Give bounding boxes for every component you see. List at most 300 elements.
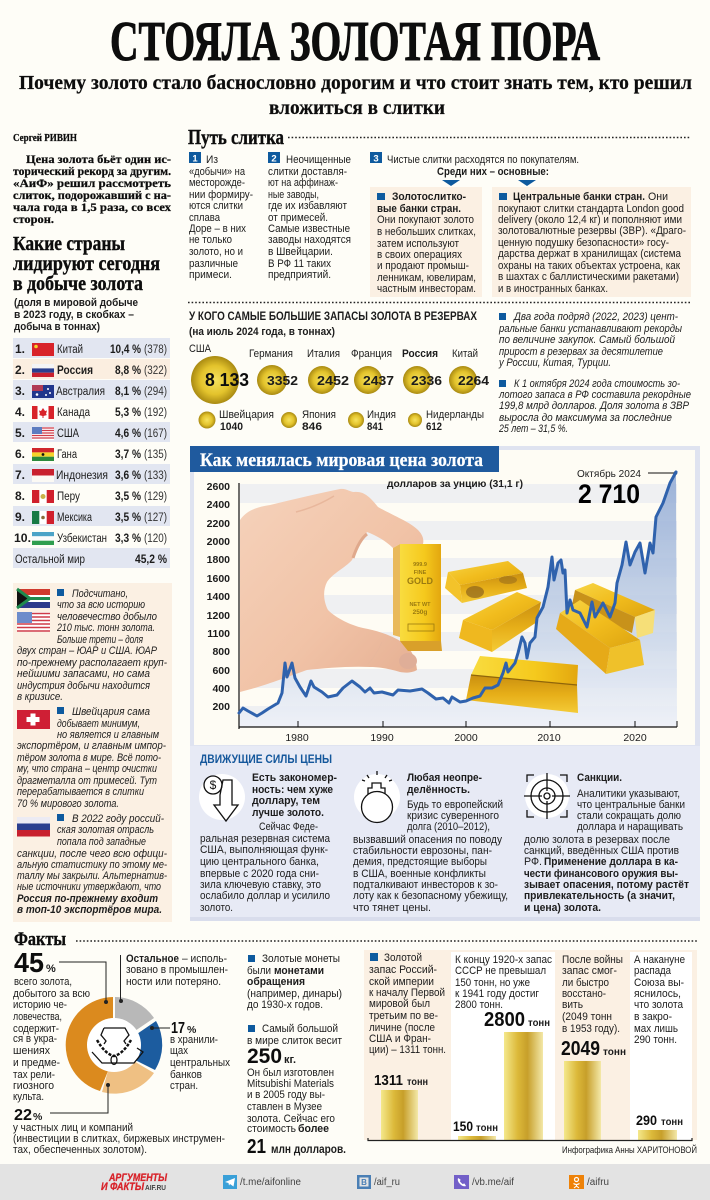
text: Switzerland: Швейцария сама xyxy=(72,706,150,718)
bubble: Russia xyxy=(402,348,442,394)
column: collapse of USSR: что золота xyxy=(634,999,684,1011)
step 2: от примесей. xyxy=(268,212,328,224)
text: Russia sanctions: Россия по-прежнему входит xyxy=(17,893,158,905)
callout: 45%: гиозного xyxy=(13,1080,54,1092)
subheading: (доля в мировой добыче xyxy=(14,297,138,309)
bubble: Germany xyxy=(249,348,298,395)
heading: driving forces: ДВИЖУЩИЕ СИЛЫ ЦЕНЫ xyxy=(200,752,332,766)
panel: bullion banks: частным инвесторам. xyxy=(377,283,476,295)
text: Russian reserve value xyxy=(498,378,691,435)
row: Canada: (192) xyxy=(144,407,167,419)
link: vk: /aif_ru xyxy=(374,1177,400,1188)
row: Uzbekistan: (120) xyxy=(144,533,167,545)
step 1: «добычи» на xyxy=(189,166,246,178)
text: sanctions: долю золота в резервах после xyxy=(524,834,670,846)
callout: 45%: ловечества, xyxy=(13,1011,62,1023)
callout: October 2024: Октябрь 2024 xyxy=(577,468,641,480)
row: Uzbekistan: 3,3 % xyxy=(115,531,141,545)
column: Russian Empire: личине (после xyxy=(369,1022,435,1034)
column: collapse of USSR: мах лишь xyxy=(634,1023,678,1035)
callout: 45%: культа. xyxy=(13,1091,44,1103)
panel: central banks: золотовалютные резервы (ЗВР). «Драго- xyxy=(498,225,686,237)
heading: gold mining leaders: лидируют сегодня xyxy=(13,253,160,275)
column: postwar: тонн xyxy=(603,1046,626,1058)
callout: 17%: щах xyxy=(170,1045,188,1057)
text: Switzerland xyxy=(17,706,166,810)
heading: gold mining leaders: Какие страны xyxy=(13,233,125,255)
y axis: 800 xyxy=(212,646,230,658)
panel: central banks: Центральные банки стран. xyxy=(513,191,645,203)
column: Russian Empire: ской империи xyxy=(369,976,434,988)
callout: rest: зовано в промышлен- xyxy=(126,964,228,976)
step 1: примеси. xyxy=(189,269,232,281)
y axis: 2600 xyxy=(207,481,230,493)
text: uncertainty: в США, военные конфликты xyxy=(353,868,486,880)
column: USSR 1920s: К концу 1920-х запас xyxy=(455,954,552,966)
text: largest ingot: в мире слиток весит xyxy=(247,1035,342,1047)
column: USSR 1920s: к 1941 году достиг xyxy=(455,988,539,1000)
row: Australia: 3. xyxy=(15,384,25,398)
row: Canada: 4. xyxy=(15,405,25,419)
column: USSR 1920s: 2800 xyxy=(484,1009,525,1031)
text: uncertainty: лоту как к безопасному убежищу, xyxy=(353,890,508,902)
text: largest ingot: Самый большой xyxy=(262,1023,338,1035)
column: collapse of USSR: яснилось, xyxy=(634,988,681,1000)
bubble: France: Франция xyxy=(351,348,392,360)
column: USSR 1920s: СССР не превышал xyxy=(455,965,546,977)
row: China: Китай xyxy=(57,344,83,356)
text: central bank purchases: по величине закупок. Самый большой xyxy=(499,334,675,346)
row: Peru: 8. xyxy=(15,489,25,503)
panel: bullion banks: ленникам, ювелирам, xyxy=(377,272,476,284)
bubble: India: 841 xyxy=(367,421,383,433)
text: uncertainty: кризис суверенного xyxy=(407,810,499,822)
text: sanctions: стали сокращать долю xyxy=(577,810,681,822)
step 1 xyxy=(189,152,253,281)
panel: central banks: дарства держат в хранилищах (система xyxy=(498,248,682,260)
row: Australia xyxy=(15,384,167,398)
step 2: 2 xyxy=(271,154,277,164)
row: Australia: Австралия xyxy=(56,386,105,398)
panel: bullion banks: и продают промыш- xyxy=(377,260,469,272)
segment: jewellery 45% xyxy=(66,997,113,1091)
bubble: Netherlands xyxy=(408,409,484,433)
row: Mexico: 9. xyxy=(15,510,25,524)
bubble: USA xyxy=(189,343,249,404)
row: Indonesia: (133) xyxy=(144,470,167,482)
panel: central banks: ценную подушку безопасности» госу- xyxy=(498,237,669,249)
text: largest ingot: золота. Сейчас его xyxy=(247,1113,335,1125)
column: postwar: ли быстро xyxy=(562,977,609,989)
step 2: где их избавляют xyxy=(268,200,347,212)
row: Uzbekistan: Узбекистан xyxy=(57,533,107,545)
gold ingot bottom xyxy=(466,656,578,713)
text: world gold: Больше трети – доля xyxy=(57,634,143,646)
step 3: 3 xyxy=(373,154,379,164)
y axis: 600 xyxy=(212,665,230,677)
panel: bullion banks: Они покупают золото xyxy=(377,214,474,226)
callout: rest xyxy=(119,953,228,1003)
text: dollar law: доллару, тем xyxy=(252,795,320,807)
callout: 22%: % xyxy=(33,1111,43,1123)
gold ingot upright xyxy=(393,544,442,651)
row: USA xyxy=(15,426,167,440)
callout: 17%: банков xyxy=(170,1069,202,1081)
link: odnoklassniki: /aifru xyxy=(587,1177,609,1188)
chart title banner: Как менялась мировая цена золота xyxy=(200,450,483,471)
step 2: в Швейцарии. xyxy=(268,246,333,258)
step 1: нии формиру- xyxy=(189,189,253,201)
row: China: 10,4 % xyxy=(110,342,141,356)
text: uncertainty: вызвавший опасения по поводу xyxy=(353,834,502,846)
column: USSR 1920s: тонн xyxy=(476,1122,498,1134)
text: dollar law: США, выполняющая функ- xyxy=(200,844,328,856)
row: Mexico: Мексика xyxy=(57,512,92,524)
text: dollar law: лучше золото. xyxy=(252,807,324,819)
text: Russia sanctions: ская золотая отрасль xyxy=(57,824,154,836)
intro text xyxy=(13,152,172,226)
callout: rest: ности или потеряно. xyxy=(126,976,221,988)
text: world gold: человечество добыло xyxy=(57,611,157,623)
panel: central banks: и в иностранных банках. xyxy=(498,283,608,295)
callout: 45%: тах рели- xyxy=(13,1069,55,1081)
row: Ghana xyxy=(15,447,167,461)
text: sanctions xyxy=(524,772,689,914)
column: postwar: запас смог- xyxy=(562,965,617,977)
step 2: заводы находятся xyxy=(268,234,351,246)
text: Russia sanctions: попала под западные xyxy=(57,836,146,848)
panel: bullion banks: в своих операциях xyxy=(377,249,462,261)
text: Russia sanctions: в топ-10 экспортёров мира. xyxy=(17,904,162,916)
text: gold coins: Золотые монеты xyxy=(262,953,340,965)
step 2 xyxy=(268,152,351,281)
text: world gold: 210 тыс. тонн золота. xyxy=(56,622,155,634)
flag: Russia xyxy=(17,817,50,836)
text: uncertainty xyxy=(353,772,508,914)
row: Peru xyxy=(15,489,167,503)
y axis: 1200 xyxy=(207,610,230,622)
text: dollar law xyxy=(200,772,337,914)
text: dollar law: впервые с 2020 года сни- xyxy=(200,868,319,880)
text: dollar law: цию центрального банка, xyxy=(200,856,319,868)
link: telegram xyxy=(223,1175,301,1189)
text: world gold: нейшими запасами, но сама xyxy=(17,668,150,680)
text: dollar law: Сейчас Феде- xyxy=(259,821,318,833)
text: central bank purchases: прирост в резервах за десятилетие xyxy=(499,346,663,358)
logo: AIF.RU xyxy=(145,1183,166,1192)
callout: 45%: содержит- xyxy=(13,1023,59,1035)
step 1: сплава xyxy=(189,212,221,224)
baseline xyxy=(368,1138,692,1140)
link: viber: /vb.me/aif xyxy=(472,1177,514,1188)
segment: central banks 17% xyxy=(133,1021,162,1070)
step 1: ются слитки xyxy=(189,200,243,212)
bubble: Italy: Италия xyxy=(307,348,340,360)
row: Australia: 8,1 % xyxy=(115,384,141,398)
text: sanctions: чести финансового оружия вы- xyxy=(524,868,678,880)
callout: 45%: 45 xyxy=(14,947,44,978)
text: Russian reserve value: выросла до максимума за последние xyxy=(499,412,672,424)
step 2: Неочищенные xyxy=(286,154,351,166)
text: uncertainty: долга (2010–2012), xyxy=(407,821,490,833)
text: largest ingot: ставлен в Музее xyxy=(247,1101,322,1113)
text: sanctions: зывает опасения, потому растёт xyxy=(524,879,689,891)
row: Russia: 2. xyxy=(15,363,25,377)
row: Peru: 3,5 % xyxy=(115,489,141,503)
text: Switzerland: му, что страна – центр очистки xyxy=(17,763,157,775)
text: Switzerland: перерабатывается в слитки xyxy=(17,786,144,798)
chart area under price line xyxy=(239,472,677,726)
row: Mexico: (127) xyxy=(144,512,167,524)
row: Uzbekistan xyxy=(14,531,167,545)
heading: gold mining leaders xyxy=(13,233,160,295)
row: Indonesia: 3,6 % xyxy=(115,468,141,482)
callout: 22%: 22 xyxy=(14,1107,32,1124)
row: Indonesia: Индонезия xyxy=(56,470,108,482)
link: telegram: /t.me/aifonline xyxy=(240,1177,301,1188)
text: dollar law: Есть закономер- xyxy=(252,772,337,784)
text: uncertainty: Будь то европейский xyxy=(407,799,503,811)
intro text: слиток, подорожавший с на- xyxy=(13,188,171,202)
text: largest ingot: кг. xyxy=(284,1054,296,1066)
y axis: 1600 xyxy=(207,573,230,585)
bubble: Japan: Япония xyxy=(302,409,336,421)
gold ingot upright: NET WT xyxy=(409,602,431,608)
row: Mexico: 3,5 % xyxy=(115,510,141,524)
row: USA: (167) xyxy=(144,428,167,440)
y axis: 2200 xyxy=(207,518,230,530)
text: uncertainty: подталкивают инвесторов к зо- xyxy=(353,879,498,891)
heading: gold mining leaders: в добыче золота xyxy=(13,273,143,295)
subheading: добыча в тоннах) xyxy=(14,321,100,333)
text: uncertainty: стабильности еврозоны, пан- xyxy=(353,845,492,857)
column: Russian Empire: к началу Первой xyxy=(369,987,445,999)
gold ingot upright: FINE xyxy=(414,570,427,576)
text: sanctions: доллара и наращивать xyxy=(577,821,683,833)
icon: target xyxy=(524,773,570,819)
column: collapse of USSR: распада xyxy=(634,965,672,977)
row: China xyxy=(15,342,167,356)
text: Switzerland: добывает минимум, xyxy=(57,718,140,730)
panel: central banks: в шахтах с баллистическими ракетами) xyxy=(498,271,679,283)
row: rest of the world: Остальной мир xyxy=(15,554,85,566)
row: Indonesia: 7. xyxy=(15,468,25,482)
text: Switzerland: тёром золота в мире. Всё пото- xyxy=(17,752,161,764)
icon: necklace xyxy=(92,1028,143,1064)
x axis: 1980 xyxy=(285,732,309,744)
intro text: «АиФ» решил рассмотреть xyxy=(13,176,172,190)
logo xyxy=(101,1172,168,1193)
column: USSR 1920s: 150 тонн, но уже xyxy=(455,977,530,989)
row: Uzbekistan: 10. xyxy=(14,531,31,545)
bubble: India xyxy=(348,409,396,433)
callout: 45%: и предме- xyxy=(13,1057,60,1069)
callout: 45%: историю че- xyxy=(13,999,67,1011)
text: sanctions: Аналитики указывают, xyxy=(577,788,680,800)
step 2: Самые известные xyxy=(268,223,350,235)
callout: 17% xyxy=(150,1020,230,1092)
text: gold coins: (например, динары) xyxy=(247,988,342,1000)
text: Switzerland: 70 % мирового золота. xyxy=(17,798,119,810)
gold price line xyxy=(239,472,676,716)
panel: central banks: покупают слитки стандарта London good xyxy=(498,203,684,215)
heading: facts: Факты xyxy=(14,929,66,950)
step 1: различные xyxy=(189,258,238,270)
panel: bullion banks xyxy=(370,187,482,297)
intro text: торический рекорд за другим. xyxy=(13,164,171,178)
bubble chart: gold reserves xyxy=(189,343,490,433)
text: dollar law: ность: чем хуже xyxy=(252,784,333,796)
text: gold coins: были xyxy=(247,965,271,977)
y axis: 400 xyxy=(212,683,230,695)
text: Switzerland: драгметалла от примесей. Тут xyxy=(17,775,157,787)
gold ingot upright: 999.9 xyxy=(413,562,427,568)
row: rest of the world xyxy=(15,552,167,566)
row: rest of the world: 45,2 % xyxy=(135,552,167,566)
arrow: to bullion banks xyxy=(442,180,460,186)
text: gold coins: до 1930-х годов. xyxy=(247,999,323,1011)
row: USA: 5. xyxy=(15,426,25,440)
step 1: золото, но и xyxy=(189,246,243,258)
row: Ghana: Гана xyxy=(57,449,77,461)
x axis: 1990 xyxy=(370,732,394,744)
text: uncertainty: демия, предстоящие выборы xyxy=(353,856,487,868)
column: USSR 1920s: тонн xyxy=(528,1017,550,1029)
bubble: Japan: 846 xyxy=(302,421,322,433)
row: Peru: (129) xyxy=(144,491,167,503)
text: world gold: индустрия добычи находится xyxy=(17,680,150,692)
bubble: USA: США xyxy=(189,343,211,355)
text: world gold: в кризисе. xyxy=(17,691,63,703)
panel: gold price chart xyxy=(190,446,700,746)
subtitle xyxy=(19,72,692,119)
callout: 45%: добытого за всю xyxy=(13,988,90,1000)
bubble: Germany: 3352 xyxy=(267,373,298,388)
y axis: 2000 xyxy=(207,536,230,548)
callout: 45% xyxy=(13,947,108,1103)
intro text: сторон. xyxy=(13,212,54,226)
bubble: China: 2264 xyxy=(458,373,490,388)
callout: 22% xyxy=(13,1083,225,1156)
row: Australia: (294) xyxy=(144,386,167,398)
column: USSR 1920s: 2800 тонн. xyxy=(455,999,503,1011)
y axis: 1100 xyxy=(207,628,230,640)
text: largest ingot: стоимость xyxy=(247,1123,296,1135)
step 2: слитки доставля- xyxy=(268,166,347,178)
link: viber xyxy=(454,1175,514,1189)
text: uncertainty: делённость. xyxy=(407,784,470,796)
step 3 xyxy=(370,152,579,178)
column: collapse of USSR: 290 тонн. xyxy=(634,1034,677,1046)
text: sanctions: Санкции. xyxy=(577,772,622,784)
callout: 17%: 17 xyxy=(171,1020,185,1037)
bar chart: Russia and USSR gold reserves xyxy=(364,950,697,1140)
heading: gold reserves: (на июль 2024 года, в тоннах) xyxy=(189,326,335,338)
subtitle: Почему золото стало баснословно дорогим и что стоит знать тем, кто решил xyxy=(19,72,692,94)
text: largest ingot: 21 xyxy=(247,1136,266,1158)
bubble: France xyxy=(351,348,394,394)
text: largest ingot: Он был изготовлен xyxy=(247,1067,334,1079)
text: world gold: что за всю историю xyxy=(57,599,145,611)
callout: 17%: стран. xyxy=(170,1080,198,1092)
text: sanctions: Применение доллара в ка- xyxy=(544,856,678,868)
text: sanctions: что центральные банки xyxy=(577,799,685,811)
callout: 45%: шениях xyxy=(13,1045,50,1057)
callout: October 2024: 2 710 xyxy=(578,479,640,509)
callout: 17%: % xyxy=(187,1024,197,1036)
column: Russian Empire: тонн xyxy=(407,1076,428,1088)
bubble: France: 2437 xyxy=(363,373,394,388)
table: top gold mining countries xyxy=(13,338,170,568)
flag: South Africa xyxy=(17,589,50,608)
gold ingot top xyxy=(445,561,527,603)
row: Ghana: (135) xyxy=(144,449,167,461)
text: Russia sanctions: таллу мы закрыли. Альтернатив- xyxy=(17,870,167,882)
text: sanctions: РФ. xyxy=(524,856,542,868)
row: Russia: (322) xyxy=(144,365,167,377)
segment: rest xyxy=(115,997,154,1033)
row: Indonesia xyxy=(15,468,167,482)
row: China: (378) xyxy=(144,344,167,356)
x axis xyxy=(239,721,677,744)
y axis: 2400 xyxy=(207,499,230,511)
text: Russia sanctions: санкции, после чего всю офици- xyxy=(17,848,167,860)
text: world gold: двух стран – ЮАР и США. ЮАР xyxy=(17,645,157,657)
bubble: Russia: 2336 xyxy=(411,373,442,388)
step 1: 1 xyxy=(192,154,198,164)
step 3: Среди них – основные: xyxy=(437,166,549,178)
row: Canada: 5,3 % xyxy=(115,405,141,419)
chart stripes xyxy=(240,484,677,727)
row: USA: США xyxy=(57,428,79,440)
column: USSR 1920s xyxy=(453,954,552,1140)
chart unit label: долларов за унцию (31,1 г) xyxy=(387,478,523,490)
panel: driving forces xyxy=(190,746,700,921)
column: Russian Empire: Золотой xyxy=(384,952,422,964)
text: Russia sanctions: В 2022 году россий- xyxy=(72,813,164,825)
row: China: 1. xyxy=(15,342,25,356)
bubble: Italy: 2452 xyxy=(317,373,349,388)
column: Russian Empire xyxy=(369,952,446,1140)
column: Russian Empire: третьим по ве- xyxy=(369,1010,438,1022)
y axis: 200 xyxy=(212,701,230,713)
text: world gold: Подсчитано, xyxy=(72,588,128,600)
text: dollar law: зила ключевую ставку, это xyxy=(200,879,321,891)
text: largest ingot: 250 xyxy=(247,1045,282,1068)
text: Russia sanctions: ные источники утверждают, что xyxy=(17,881,161,893)
panel: bullion banks: затем используют xyxy=(377,238,459,250)
bubble: China xyxy=(449,348,490,394)
bubble: India: Индия xyxy=(367,409,396,421)
text: sanctions: и цена) золота. xyxy=(524,902,601,914)
step 1: Доре – в них xyxy=(189,223,246,235)
bubble: Switzerland: 1040 xyxy=(220,421,243,433)
callout: rest: – исполь- xyxy=(182,953,227,965)
text: largest ingot xyxy=(247,1023,346,1158)
panel: bullion banks: Золотослитко- xyxy=(392,191,466,203)
column: Russian Empire: ции) – 1311 тонн. xyxy=(369,1044,446,1056)
row: Canada xyxy=(15,405,167,419)
x axis: 2020 xyxy=(623,732,647,744)
text: dollar law: ослабило доллар и усилило xyxy=(200,890,330,902)
step 1: не только xyxy=(189,234,232,246)
flag: Switzerland xyxy=(17,710,50,729)
text: dollar law: ральная резервная система xyxy=(200,833,331,845)
row: Russia: Россия xyxy=(57,365,93,377)
step 2: предприятий. xyxy=(268,269,331,281)
bubble: Japan xyxy=(281,409,336,433)
callout: 22%: тах, обеспеченных золотом). xyxy=(13,1144,147,1156)
